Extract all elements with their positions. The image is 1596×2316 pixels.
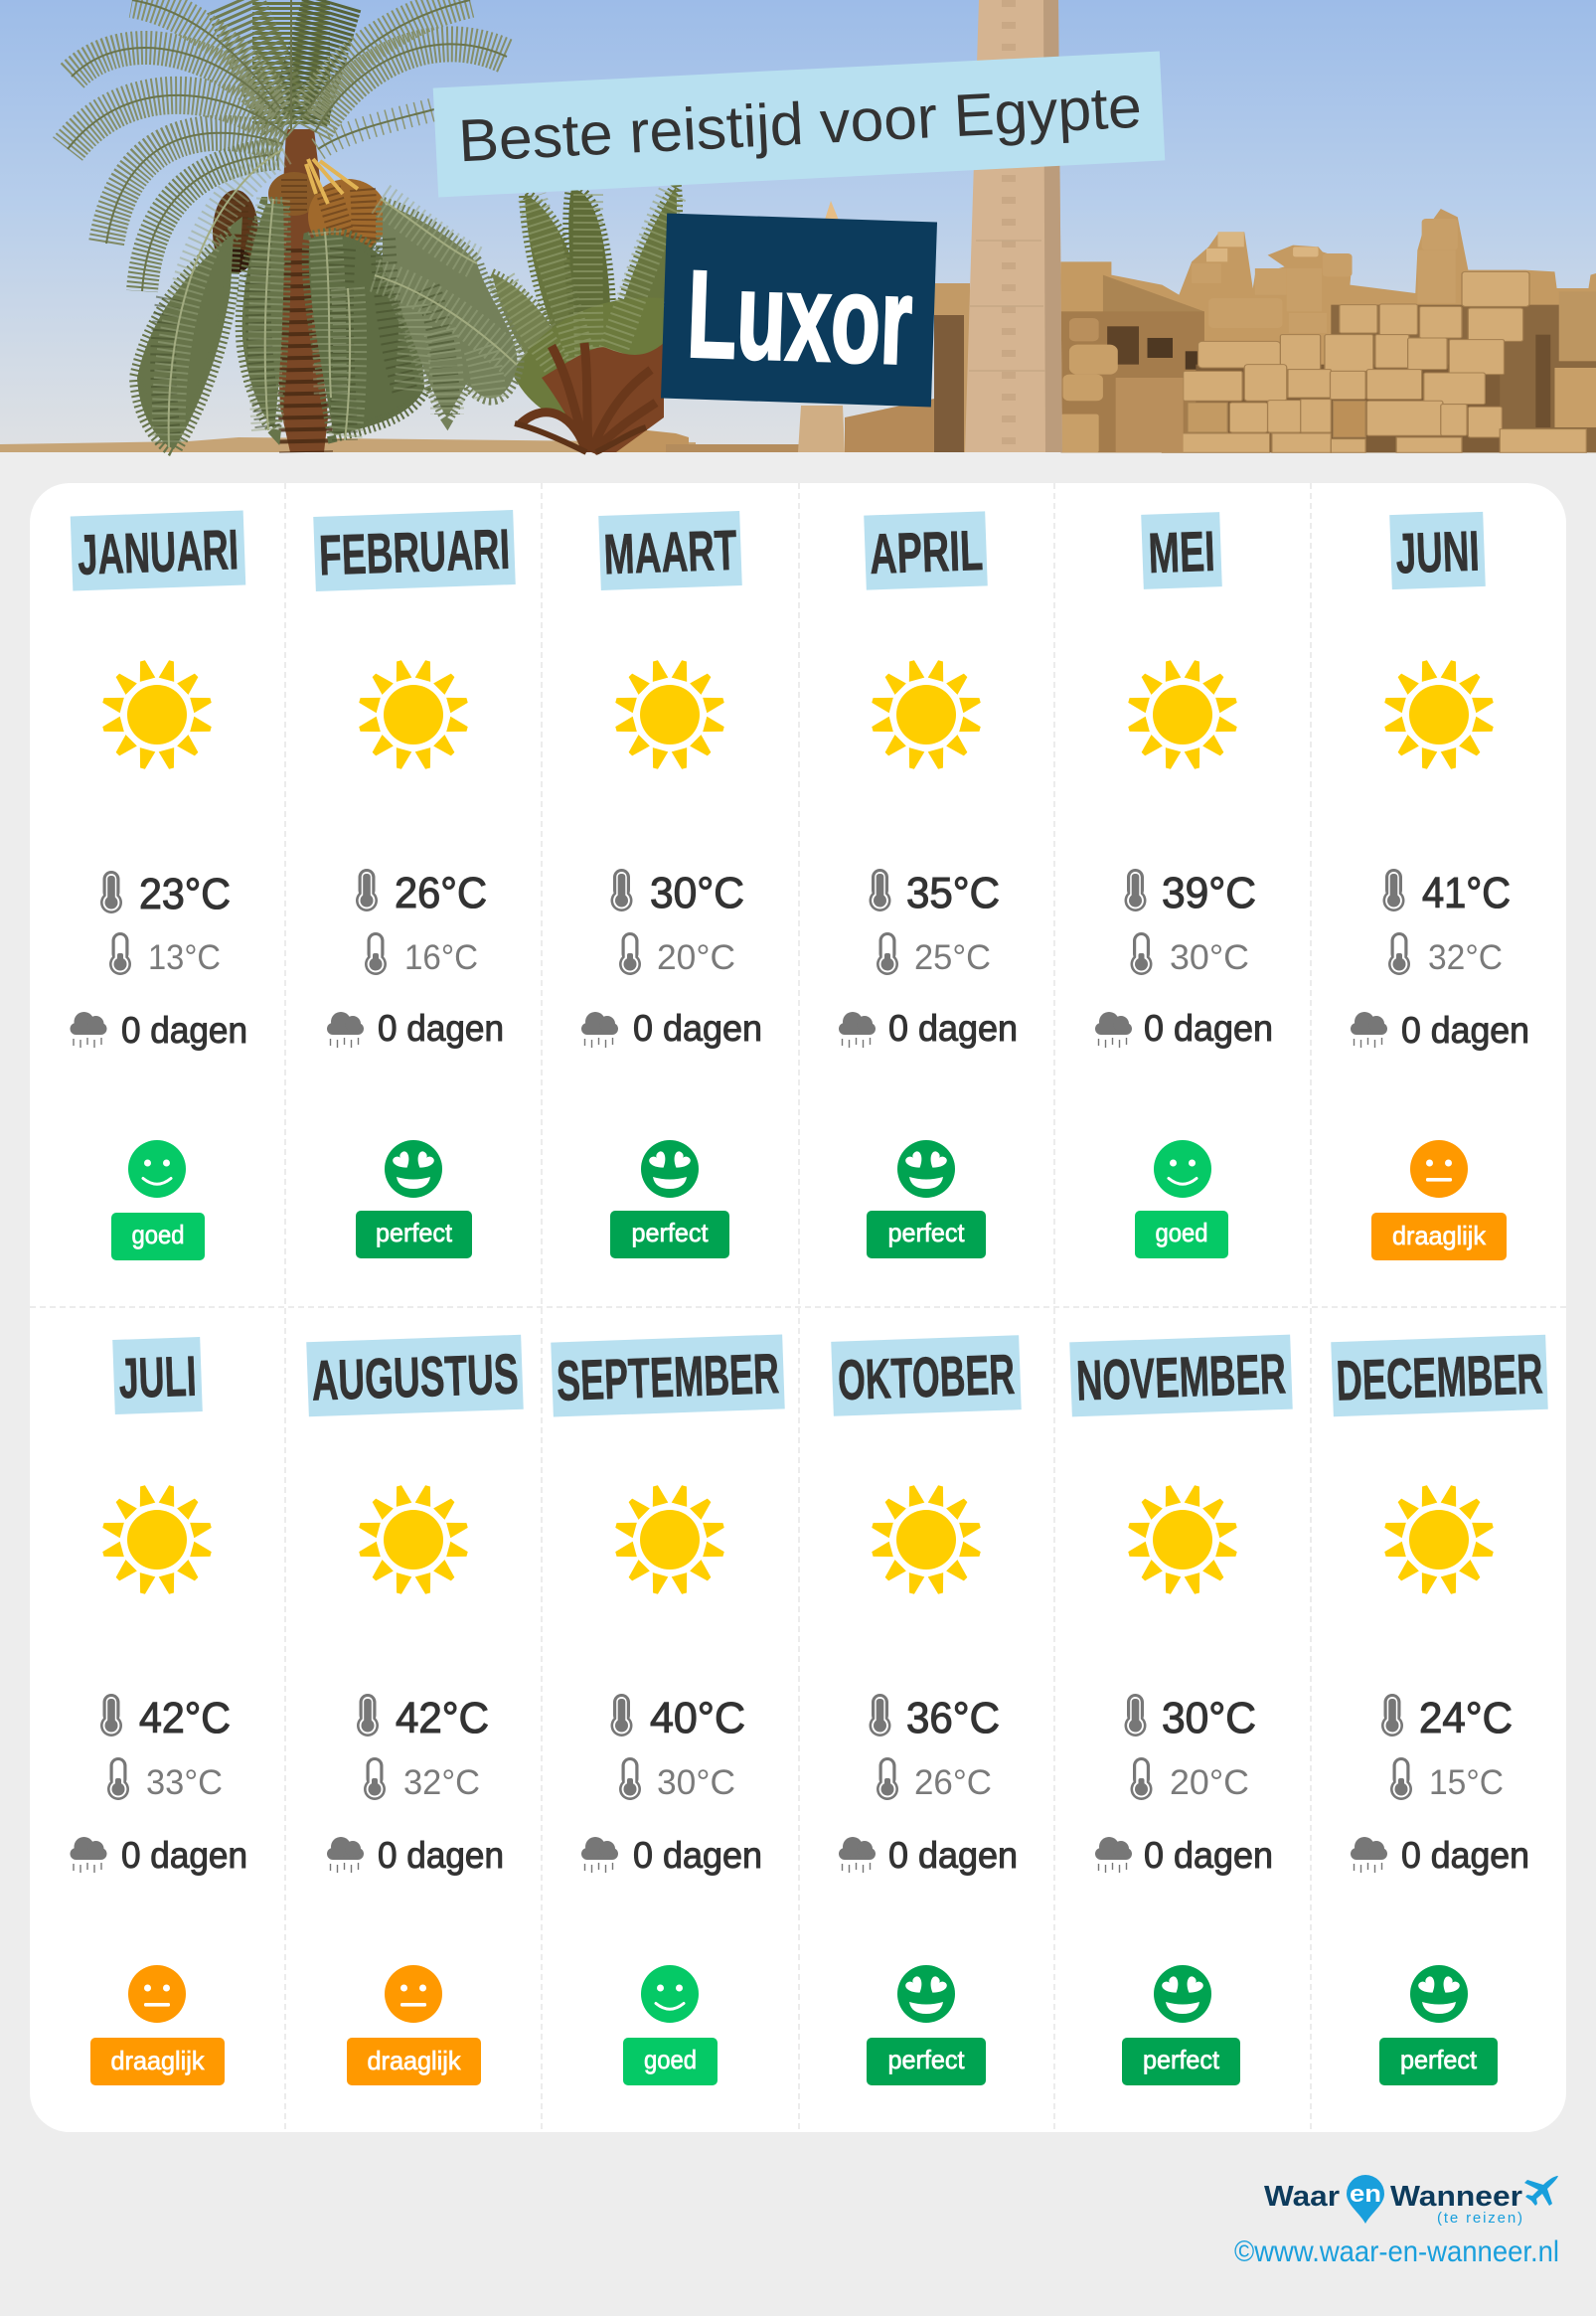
month label xyxy=(598,511,742,590)
month: september xyxy=(551,1334,785,2085)
icon: sun xyxy=(871,1484,982,1595)
rating badge xyxy=(1379,2038,1498,2085)
high temperature: 42°C xyxy=(139,1694,231,1742)
high temperature: 26°C xyxy=(395,869,487,917)
rain days: 0 dagen xyxy=(1401,1010,1529,1051)
rating badge: goed xyxy=(1155,1218,1208,1247)
rain days xyxy=(581,1835,762,1876)
month label: SEPTEMBER xyxy=(556,1342,780,1413)
rating face xyxy=(897,1140,955,1198)
title: Luxor: Luxor xyxy=(686,246,914,391)
month label xyxy=(551,1334,785,1417)
low temperature: 33°C xyxy=(146,1763,223,1802)
icon: sun xyxy=(358,659,469,770)
high temperature: 36°C xyxy=(906,1694,1000,1742)
month label: OKTOBER xyxy=(837,1343,1016,1412)
rating face xyxy=(128,1140,186,1198)
month label: JANUARI xyxy=(77,518,239,587)
month: juli xyxy=(70,1337,247,2085)
month label: NOVEMBER xyxy=(1075,1342,1287,1413)
icon: sun xyxy=(101,1484,213,1595)
rating badge: draaglijk xyxy=(111,2046,205,2075)
rating badge: perfect xyxy=(1400,2045,1478,2074)
low temperature: 32°C xyxy=(1428,938,1503,977)
low temperature xyxy=(619,932,735,977)
subtitle banner xyxy=(433,52,1165,197)
low temperature: 32°C xyxy=(403,1763,480,1802)
rating badge: draaglijk xyxy=(368,2046,461,2075)
header photo: Karnak temple with palm trees xyxy=(0,0,1596,452)
rating badge: perfect xyxy=(888,2045,965,2074)
rain days: 0 dagen xyxy=(1144,1835,1273,1876)
rating badge xyxy=(867,2038,986,2085)
month label: APRIL xyxy=(869,519,984,586)
low temperature xyxy=(1131,1757,1249,1802)
month label xyxy=(71,510,245,591)
high temperature: 42°C xyxy=(396,1694,489,1742)
rain days xyxy=(1351,1835,1529,1876)
month: augustus xyxy=(306,1335,524,2085)
month: december xyxy=(1331,1335,1548,2085)
rating face xyxy=(128,1965,186,2023)
month label: AUGUSTUS xyxy=(311,1342,520,1413)
subtitle banner: Beste reistijd voor Egypte xyxy=(457,74,1143,174)
low temperature xyxy=(365,932,478,977)
icon: sun xyxy=(1383,1484,1495,1595)
high temperature xyxy=(610,1694,745,1742)
rating badge: draaglijk xyxy=(1392,1221,1487,1250)
rating badge: perfect xyxy=(888,1218,965,1247)
rating face xyxy=(1410,1140,1468,1198)
high temperature: 35°C xyxy=(906,869,1000,917)
low temperature: 25°C xyxy=(914,938,991,977)
high temperature xyxy=(1125,869,1256,917)
rain days: 0 dagen xyxy=(121,1835,247,1876)
rain days: 0 dagen xyxy=(633,1835,762,1876)
rain days xyxy=(70,1010,247,1051)
icon: sun xyxy=(358,1484,469,1595)
high temperature: 30°C xyxy=(650,869,744,917)
rain days: 0 dagen xyxy=(1401,1835,1529,1876)
icon: sun xyxy=(1127,1484,1238,1595)
month label: JULI xyxy=(117,1345,198,1410)
low temperature: 30°C xyxy=(657,1763,735,1802)
rating badge: goed xyxy=(644,2045,697,2074)
logo: Waar en Wanneer: Waar xyxy=(1264,2181,1340,2213)
panel: monthly climate table xyxy=(30,483,1566,2132)
low temperature xyxy=(364,1757,480,1802)
logo: Waar en Wanneer: (te reizen) xyxy=(1437,2210,1522,2227)
rating face xyxy=(897,1965,955,2023)
month label: MAART xyxy=(602,519,738,586)
month label xyxy=(1389,512,1486,589)
rain days: 0 dagen xyxy=(378,1835,504,1876)
high temperature xyxy=(869,869,1000,917)
high temperature: 24°C xyxy=(1419,1694,1513,1742)
month label: JUNI xyxy=(1394,520,1481,585)
logo: Waar en Wanneer: Wanneer xyxy=(1390,2181,1522,2213)
logo: Waar en Wanneer xyxy=(1264,2175,1558,2227)
icon: sun xyxy=(871,659,982,770)
low temperature: 20°C xyxy=(1170,1763,1249,1802)
rain days xyxy=(327,1008,504,1049)
month label: FEBRUARI xyxy=(318,518,511,587)
low temperature xyxy=(109,932,221,977)
website credit: ©www.waar-en-wanneer.nl xyxy=(1234,2235,1559,2268)
rain days xyxy=(327,1835,504,1876)
high temperature xyxy=(100,1694,231,1742)
rain days: 0 dagen xyxy=(888,1008,1018,1049)
high temperature xyxy=(356,869,487,917)
rating badge: perfect xyxy=(632,1218,709,1247)
rain days: 0 dagen xyxy=(633,1008,762,1049)
month label xyxy=(306,1335,524,1416)
rating face xyxy=(1410,1965,1468,2023)
icon: airplane xyxy=(1524,2176,1558,2206)
month: oktober xyxy=(831,1335,1022,2085)
month: mei xyxy=(1095,512,1273,1258)
rating badge xyxy=(347,2038,481,2085)
month: februari xyxy=(313,510,516,1258)
rating badge xyxy=(90,2038,225,2085)
title: Luxor xyxy=(661,214,937,407)
month label xyxy=(1141,512,1222,589)
icon: sun xyxy=(1383,659,1495,770)
high temperature xyxy=(1381,1694,1513,1742)
rain days: 0 dagen xyxy=(378,1008,504,1049)
rating badge: perfect xyxy=(376,1218,453,1247)
high temperature xyxy=(100,870,231,918)
month label xyxy=(831,1335,1022,1416)
low temperature: 13°C xyxy=(148,938,221,977)
rating badge: perfect xyxy=(1143,2045,1220,2074)
month: juni xyxy=(1351,512,1529,1260)
icon: sun xyxy=(614,1484,725,1595)
rating face xyxy=(641,1140,699,1198)
rain days: 0 dagen xyxy=(121,1010,247,1051)
rating badge xyxy=(623,2038,718,2085)
month label: MEI xyxy=(1147,520,1216,585)
rain days: 0 dagen xyxy=(888,1835,1018,1876)
rating badge xyxy=(111,1213,205,1260)
rating face xyxy=(1154,1965,1211,2023)
high temperature xyxy=(610,869,744,917)
low temperature xyxy=(1131,932,1249,977)
high temperature xyxy=(869,1694,1000,1742)
icon: sun xyxy=(101,659,213,770)
high temperature: 23°C xyxy=(139,870,231,918)
rating badge xyxy=(356,1211,472,1258)
high temperature: 39°C xyxy=(1162,869,1256,917)
low temperature xyxy=(619,1757,735,1802)
rain days xyxy=(1351,1010,1529,1051)
low temperature: 20°C xyxy=(657,938,735,977)
logo: Waar en Wanneer: en xyxy=(1350,2181,1381,2208)
month: april xyxy=(839,511,1018,1258)
rating badge xyxy=(1135,1211,1228,1258)
rating face xyxy=(1154,1140,1211,1198)
high temperature xyxy=(1125,1694,1256,1742)
rating face xyxy=(641,1965,699,2023)
rain days xyxy=(70,1835,247,1876)
rating badge xyxy=(1371,1213,1507,1260)
rating face xyxy=(385,1140,442,1198)
high temperature: 40°C xyxy=(650,1694,745,1742)
month label xyxy=(313,510,516,591)
icon: sun xyxy=(614,659,725,770)
month label xyxy=(112,1337,203,1414)
low temperature xyxy=(1388,932,1503,977)
month label xyxy=(1069,1335,1293,1416)
high temperature: 30°C xyxy=(1162,1694,1256,1742)
rain days xyxy=(581,1008,762,1049)
low temperature: 16°C xyxy=(404,938,478,977)
rain days: 0 dagen xyxy=(1144,1008,1273,1049)
rating face xyxy=(385,1965,442,2023)
high temperature: 41°C xyxy=(1422,869,1511,917)
month: januari xyxy=(70,510,247,1260)
month label xyxy=(864,511,988,590)
icon: sun xyxy=(1127,659,1238,770)
rating badge xyxy=(610,1211,729,1258)
high temperature xyxy=(1383,869,1511,917)
rating badge xyxy=(1122,2038,1240,2085)
low temperature: 26°C xyxy=(914,1763,992,1802)
month: november xyxy=(1069,1335,1293,2085)
low temperature xyxy=(107,1757,223,1802)
low temperature: 30°C xyxy=(1170,938,1249,977)
low temperature xyxy=(877,1757,992,1802)
month: maart xyxy=(581,511,762,1258)
high temperature xyxy=(357,1694,489,1742)
low temperature: 15°C xyxy=(1429,1763,1504,1802)
rating badge: goed xyxy=(131,1220,185,1249)
rating badge xyxy=(867,1211,986,1258)
low temperature xyxy=(877,932,991,977)
low temperature xyxy=(1390,1757,1504,1802)
